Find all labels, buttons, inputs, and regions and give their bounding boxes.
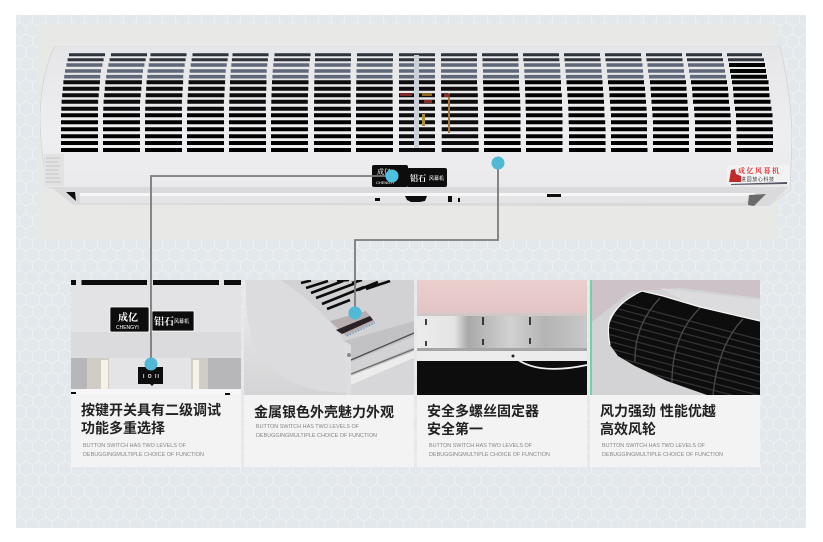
card 1 photo	[71, 280, 241, 395]
red brand sticker: 成亿风幕机	[738, 166, 780, 176]
card 3 description: BUTTON SWITCH HAS TWO LEVELS OF	[429, 443, 532, 449]
connector: switch badge to card 1	[144, 170, 398, 370]
card 1: button switch	[71, 280, 241, 467]
card 2 photo	[244, 280, 414, 395]
brand badge: 风幕机	[429, 175, 444, 182]
brand badge	[372, 165, 447, 187]
card 2: metal casing	[244, 280, 414, 467]
connector: casing to card 2	[348, 156, 504, 320]
rating label	[44, 154, 64, 186]
product photo: air curtain unit	[40, 46, 792, 206]
card 4 description: DEBUGGINGMULTIPLE CHOICE OF FUNCTION	[602, 452, 723, 458]
card 1 description: BUTTON SWITCH HAS TWO LEVELS OF	[83, 443, 186, 449]
card 1 heading: 按键开关具有二级调试	[81, 402, 221, 418]
switch slot and clips	[66, 192, 766, 206]
card 4 heading: 风力强劲 性能优越	[600, 403, 716, 419]
card 2 caption panel	[244, 395, 414, 467]
card 2 description: BUTTON SWITCH HAS TWO LEVELS OF	[256, 424, 359, 430]
card 1 description: DEBUGGINGMULTIPLE CHOICE OF FUNCTION	[83, 452, 204, 458]
card 1 photo: I O II	[143, 374, 160, 380]
lower trim	[48, 187, 789, 206]
red brand sticker: 进园放心科技	[741, 176, 775, 183]
card 4 heading: 高效风轮	[600, 421, 656, 437]
card 3: fixing screws	[417, 280, 587, 467]
card 2 description: DEBUGGINGMULTIPLE CHOICE OF FUNCTION	[256, 433, 377, 439]
brand badge: 铝石	[410, 173, 426, 184]
fan drum	[608, 290, 760, 395]
card 1 photo: 铝石	[154, 313, 174, 328]
internal parts seen through vent	[400, 55, 450, 148]
spec sticker	[330, 311, 375, 336]
brand badge: CHENGYI	[376, 180, 394, 185]
card 1 caption panel	[71, 395, 241, 467]
red brand sticker	[727, 165, 790, 185]
brand badge: 成亿	[377, 167, 391, 176]
top face of unit	[281, 280, 414, 341]
card 4 caption panel	[590, 395, 760, 467]
vent slats	[61, 55, 773, 150]
curved side panel	[245, 280, 346, 393]
card 3 photo	[417, 280, 587, 395]
card 1 heading: 功能多重选择	[81, 420, 165, 436]
slats on top face	[301, 280, 390, 309]
card 1 photo: 风幕机	[174, 318, 189, 325]
card 3 description: DEBUGGINGMULTIPLE CHOICE OF FUNCTION	[429, 452, 550, 458]
card 3 heading: 安全第一	[427, 421, 483, 437]
card 1 photo: CHENGYI	[116, 325, 139, 331]
product photo backdrop	[38, 24, 777, 240]
unit body	[40, 46, 792, 206]
card 4 photo	[590, 280, 760, 395]
card 4: fan wheel	[590, 280, 760, 467]
card 3 heading: 安全多螺丝固定器	[427, 403, 539, 419]
card 1 photo: 成亿	[118, 309, 138, 324]
card 3 caption panel	[417, 395, 587, 467]
card 4 description: BUTTON SWITCH HAS TWO LEVELS OF	[602, 443, 705, 449]
front recessed panels	[344, 321, 414, 395]
card 2 heading: 金属银色外壳魅力外观	[254, 404, 394, 420]
